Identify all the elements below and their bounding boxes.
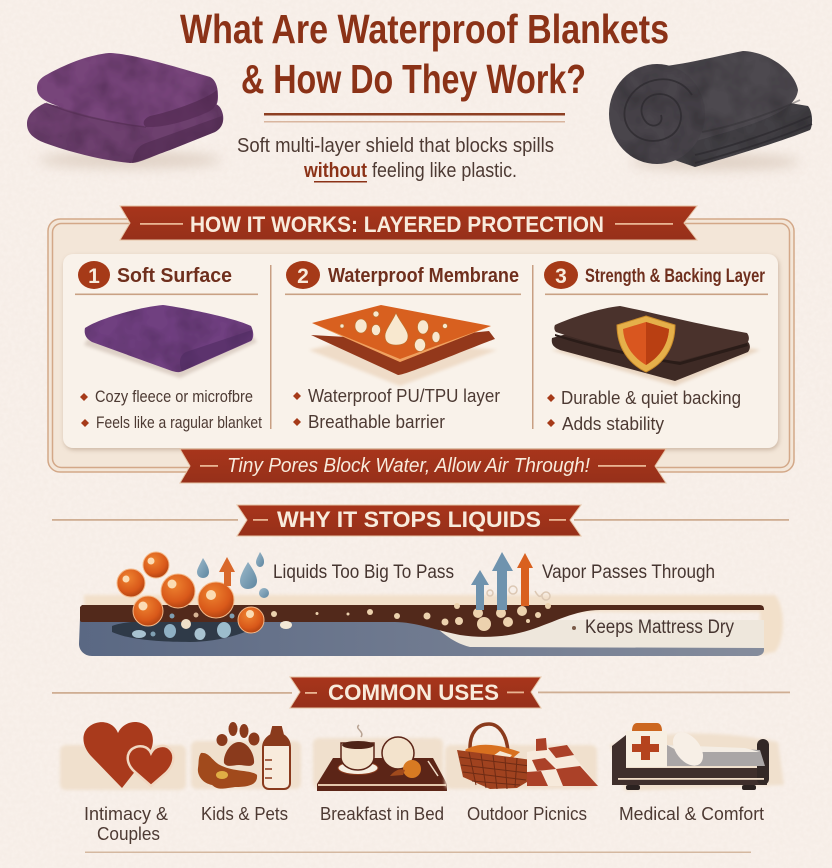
subtitle xyxy=(237,135,554,182)
cream top layer xyxy=(84,595,783,655)
panel: inner card xyxy=(63,254,778,448)
label: keeps mattress dry: Keeps Mattress Dry xyxy=(585,617,734,638)
icon: picnic basket and checkered blanket xyxy=(445,724,598,789)
title: & How Do They Work? xyxy=(241,56,586,102)
gray mattress layer xyxy=(79,618,764,656)
step 3 bullets: Durable & quiet backing xyxy=(561,388,741,408)
step 2 heading xyxy=(285,261,521,295)
icon: rolled charcoal blanket xyxy=(609,51,812,170)
diagram: layered mattress cross-section xyxy=(79,586,783,656)
panel: how it works xyxy=(48,219,794,472)
use: kids and pets xyxy=(191,722,301,824)
step 2: waterproof membrane xyxy=(285,261,521,432)
icon: membrane layers with droplets xyxy=(309,305,497,386)
step 1 bullets xyxy=(80,387,262,432)
label: Medical & Comfort xyxy=(619,804,764,824)
use: outdoor picnics xyxy=(445,724,598,824)
step 3 heading: 3 xyxy=(555,265,567,288)
title divider xyxy=(264,113,565,122)
use: intimacy and couples xyxy=(60,722,186,844)
icon: liquid droplets and orange beads xyxy=(117,552,269,633)
label xyxy=(84,804,168,844)
step 3 heading xyxy=(544,261,768,295)
label: vapor passes through: Vapor Passes Through xyxy=(542,562,715,583)
label: Couples xyxy=(97,824,160,844)
step 1 heading xyxy=(75,261,258,295)
banner: common uses: COMMON USES xyxy=(328,680,499,705)
step 2 heading: 2 xyxy=(297,265,309,288)
step 1 bullets: Feels like a ragular blanket xyxy=(96,413,262,432)
icon: hearts xyxy=(60,722,186,790)
step 3 heading: Strength & Backing Layer xyxy=(585,266,765,287)
subtitle: Soft multi-layer shield that blocks spills xyxy=(237,135,554,157)
step 2 bullets: Breathable barrier xyxy=(308,412,445,432)
step 3 bullets: Adds stability xyxy=(562,414,664,434)
label: liquids too big: Liquids Too Big To Pass xyxy=(273,562,454,583)
step 1 heading: 1 xyxy=(88,265,100,288)
step 2 heading: Waterproof Membrane xyxy=(328,265,519,287)
banner: common uses xyxy=(290,677,541,708)
use: breakfast in bed xyxy=(313,725,447,824)
brown membrane layer xyxy=(80,605,764,637)
step 1 heading: Soft Surface xyxy=(117,265,232,287)
banner: why it stops liquids xyxy=(237,505,581,536)
step 3: strength and backing layer xyxy=(544,261,768,434)
banner: tiny pores xyxy=(180,449,666,483)
section rule: common uses xyxy=(52,692,790,694)
liquid spheres xyxy=(117,552,264,633)
label: Breakfast in Bed xyxy=(320,804,444,824)
subtitle: without xyxy=(303,160,367,182)
step 2 bullets xyxy=(293,386,500,432)
title xyxy=(180,6,669,102)
icon: backing fabric with shield xyxy=(551,306,760,386)
dry cream mattress area xyxy=(400,620,764,652)
banner: how it works: HOW IT WORKS: LAYERED PROTECTION xyxy=(190,212,604,237)
arrow: blocked liquid xyxy=(219,557,235,586)
label: Outdoor Picnics xyxy=(467,804,587,824)
icon: breakfast tray xyxy=(313,725,447,791)
banner: how it works xyxy=(120,206,697,240)
banner: tiny pores: Tiny Pores Block Water, Allow Air Through! xyxy=(227,455,590,477)
step 1: soft surface xyxy=(75,261,262,432)
step 2 bullets: Waterproof PU/TPU layer xyxy=(308,386,500,406)
dark wet hollow xyxy=(112,618,264,642)
vapor bubbles xyxy=(487,586,550,600)
section rule: why it stops liquids xyxy=(52,519,789,521)
icon: paw, pet and bottle xyxy=(191,722,301,789)
subtitle: feeling like plastic. xyxy=(372,160,517,182)
column dividers xyxy=(270,265,534,429)
icon: thin purple blanket xyxy=(84,305,257,378)
icon: folded purple blanket xyxy=(27,53,223,168)
pore dots xyxy=(271,603,551,631)
icon: medical bed and first aid kit xyxy=(610,723,784,791)
use: medical and comfort xyxy=(610,723,784,824)
label: Intimacy & xyxy=(84,804,168,824)
water droplets xyxy=(197,552,269,598)
trapped water beads xyxy=(132,612,292,640)
icon: vapor arrows xyxy=(471,552,533,610)
title: What Are Waterproof Blankets xyxy=(180,6,669,52)
step 3 bullets xyxy=(547,388,741,434)
label: Kids & Pets xyxy=(201,804,288,824)
banner: why it stops liquids: WHY IT STOPS LIQUIDS xyxy=(277,507,541,532)
step 1 bullets: Cozy fleece or microfbre xyxy=(95,387,253,406)
